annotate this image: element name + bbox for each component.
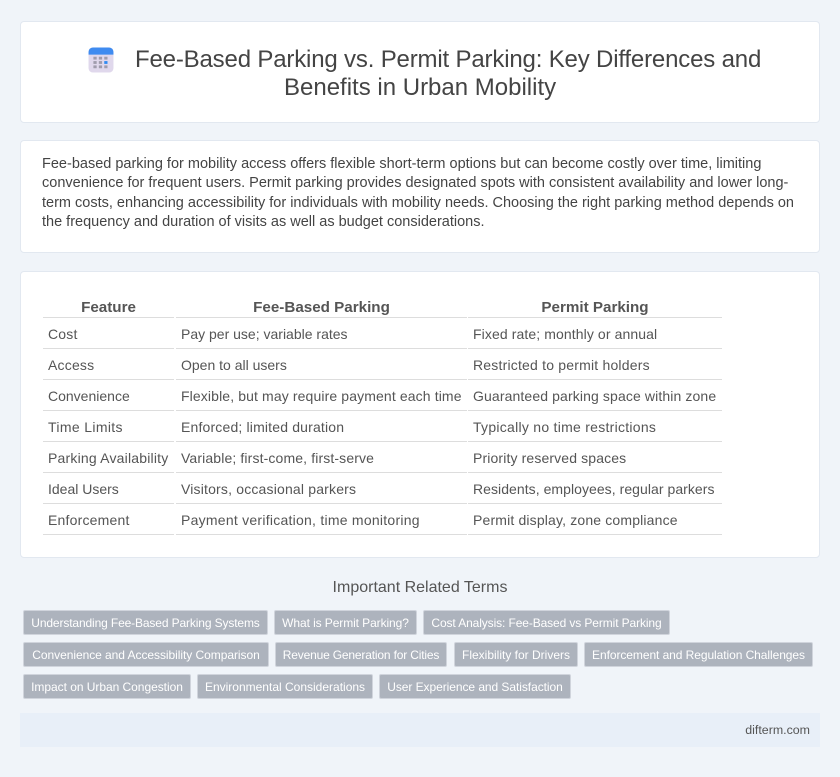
cell: Fixed rate; monthly or annual — [473, 326, 657, 342]
tag — [423, 610, 670, 635]
footer text: difterm.com — [745, 723, 810, 737]
summary paragraph — [42, 156, 794, 230]
tag: User Experience and Satisfaction — [387, 680, 563, 694]
header panel — [20, 21, 820, 123]
footer bar — [20, 713, 820, 747]
cell: Visitors, occasional parkers — [181, 481, 356, 497]
title: Fee-Based Parking vs. Permit Parking: Key Differences and — [135, 46, 761, 73]
tag — [275, 642, 447, 667]
icon: calendar — [88, 48, 114, 72]
row: Cost: Cost — [48, 326, 78, 342]
summary paragraph: term costs, enhancing accessibility for individuals with mobility needs. Choosing the right parking method depends on — [42, 195, 794, 211]
row: Time Limits: Time Limits — [48, 419, 123, 435]
table header: Permit Parking: Permit Parking — [541, 299, 649, 316]
cell: Residents, employees, regular parkers — [473, 481, 715, 497]
row: Access: Access — [48, 357, 94, 373]
tag: Enforcement and Regulation Challenges — [592, 648, 805, 662]
cell: Permit display, zone compliance — [473, 512, 678, 528]
tag — [197, 674, 373, 699]
cell: Pay per use; variable rates — [181, 326, 348, 342]
panel: comparison table — [20, 271, 820, 558]
row: Parking Availability: Parking Availability — [48, 450, 168, 466]
panel: summary text — [20, 140, 820, 253]
cell: Payment verification, time monitoring — [181, 512, 420, 528]
cell: Open to all users — [181, 357, 287, 373]
title: Benefits in Urban Mobility — [284, 74, 556, 101]
tag — [23, 674, 191, 699]
row: Ideal Users: Ideal Users — [48, 481, 119, 497]
tag — [584, 642, 813, 667]
cell: Enforced; limited duration — [181, 419, 344, 435]
cell: Restricted to permit holders — [473, 357, 650, 373]
tag — [274, 610, 417, 635]
tag: Impact on Urban Congestion — [31, 680, 183, 694]
tag: Revenue Generation for Cities — [283, 648, 439, 662]
row: Convenience: Convenience — [48, 388, 130, 404]
cell: Variable; first-come, first-serve — [181, 450, 374, 466]
cell: Flexible, but may require payment each time — [181, 388, 462, 404]
cell: Priority reserved spaces — [473, 450, 626, 466]
title — [135, 46, 761, 101]
tag: Convenience and Accessibility Comparison — [32, 648, 260, 662]
tag: Environmental Considerations — [205, 680, 365, 694]
table header: Feature: Feature — [81, 299, 136, 316]
tag: What is Permit Parking? — [282, 616, 409, 630]
table header: Fee-Based Parking: Fee-Based Parking — [253, 299, 390, 316]
tag — [379, 674, 571, 699]
tag: Cost Analysis: Fee-Based vs Permit Parking — [431, 616, 662, 630]
summary paragraph: convenience for frequent users. Permit parking provides designated spots with consistent availability and lower long- — [42, 175, 788, 191]
tag — [23, 642, 269, 667]
cell: Guaranteed parking space within zone — [473, 388, 716, 404]
summary paragraph: Fee-based parking for mobility access offers flexible short-term options but can become costly over time, limiting — [42, 156, 761, 172]
tag — [23, 610, 268, 635]
tag: Understanding Fee-Based Parking Systems — [31, 616, 260, 630]
heading: related terms: Important Related Terms — [333, 579, 507, 596]
summary paragraph: the frequency and duration of visits as well as budget considerations. — [42, 214, 485, 230]
cell: Typically no time restrictions — [473, 419, 656, 435]
row: Enforcement: Enforcement — [48, 512, 130, 528]
tag: Flexibility for Drivers — [462, 648, 570, 662]
tag — [454, 642, 578, 667]
